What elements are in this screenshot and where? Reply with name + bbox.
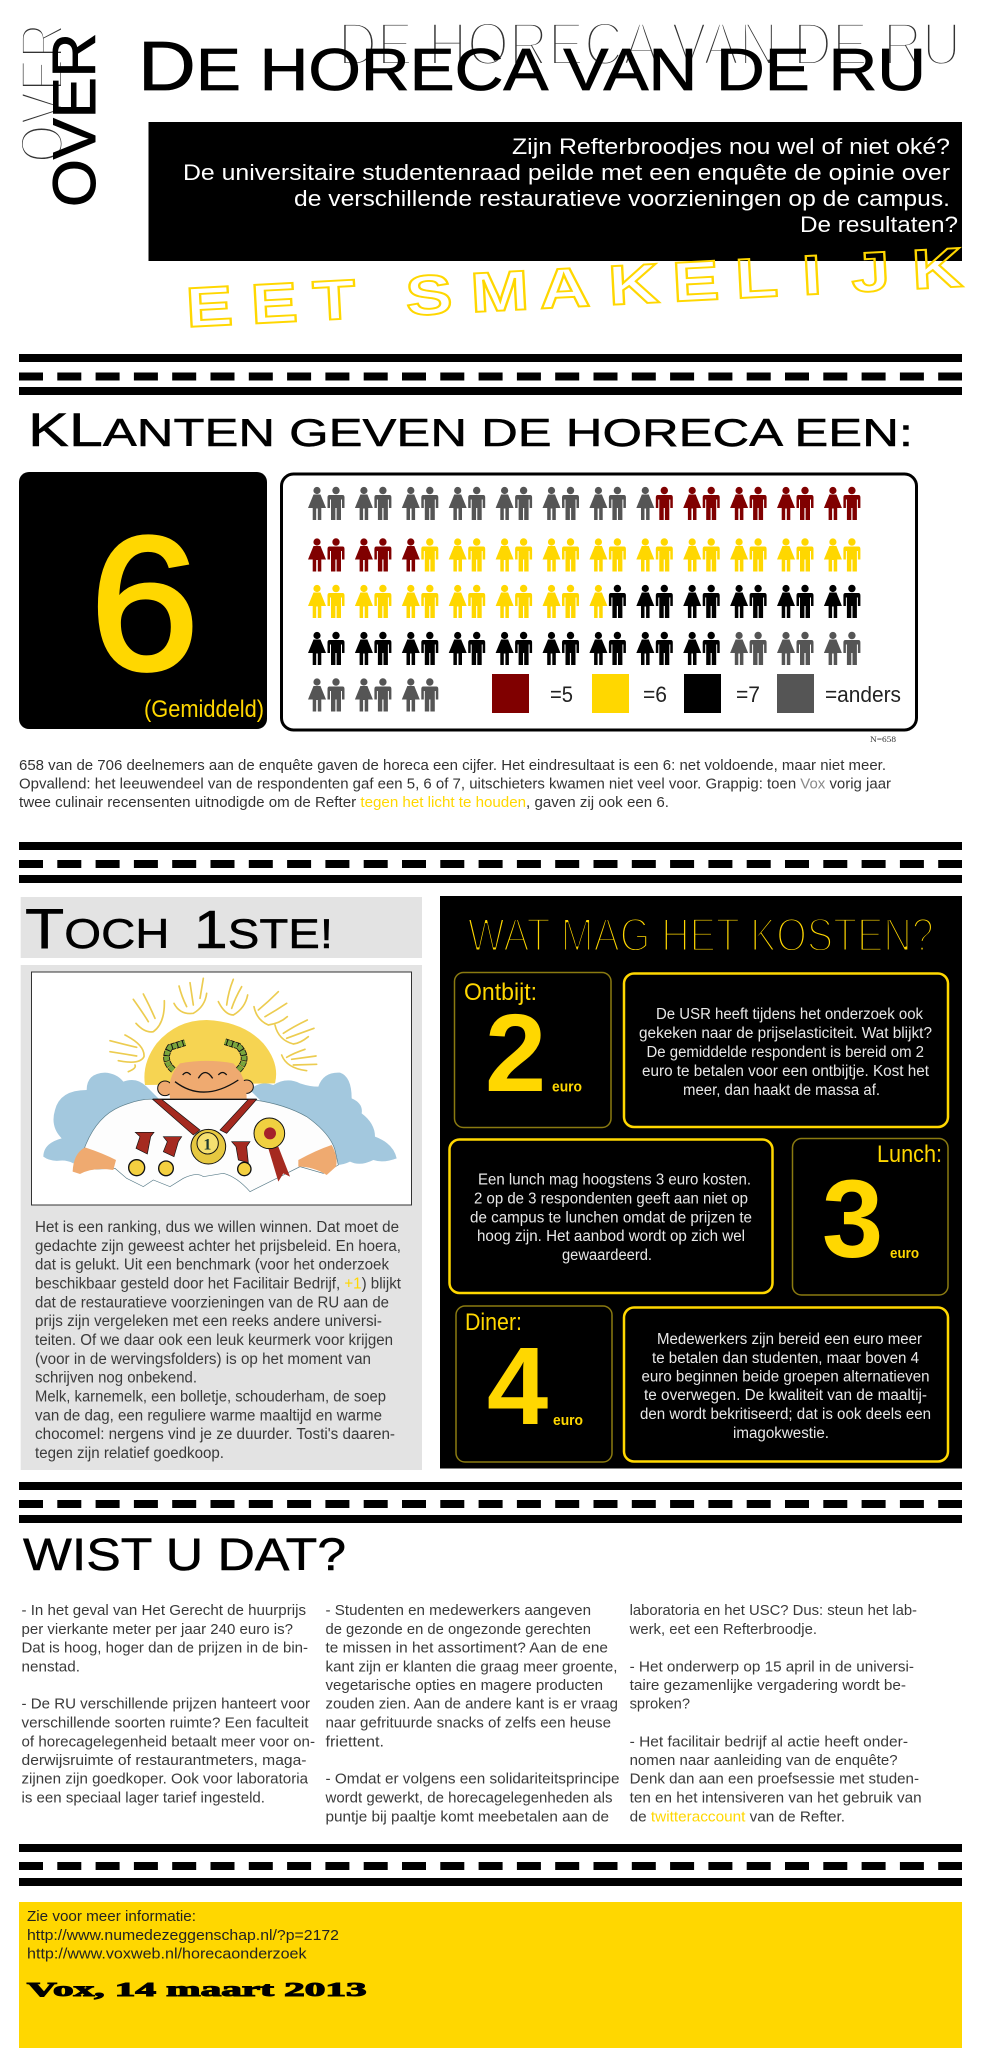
big number six: 6 [90,498,199,710]
text column 2 [324,1602,620,1825]
text column 3: Denk dan aan een proefsessie met studen- [630,1771,919,1788]
text column 1: nenstad. [22,1658,80,1676]
card: ontbijt explanation: gekeken naar de prijselasticiteit. Wat blijkt? [639,1025,932,1042]
text block: ranking: schrijven nog onbekend. [35,1370,197,1387]
text column 1: derwijsruimte of restaurantmeters, maga- [22,1752,306,1769]
legend: =anders [825,682,901,707]
card: ontbijt explanation: euro te betalen voor een ontbijtje. Kost het [642,1063,930,1080]
card: lunch explanation: gewaardeerd. [562,1247,652,1264]
heading: klanten geven de horeca een: KL ANTEN GEVEN DE HORECA EEN: [28,403,913,456]
text column 3: de twitteraccount van de Refter. [630,1808,845,1825]
text column 2: - Studenten en medewerkers aangeven [326,1602,591,1619]
footer panel [19,1902,962,2048]
card: ontbijt price: euro [552,1078,582,1096]
text block: ranking: Melk, karnemelk, een bolletje, schouderham, de soep [35,1389,386,1406]
text column 2: de gezonde en de ongezonde gerechten [326,1621,591,1638]
card: lunch explanation: Een lunch mag hoogstens 3 euro kosten. [478,1172,751,1189]
footer links: Zie voor meer informatie: [27,1908,196,1925]
card: diner explanation: te betalen dan studenten, maar boven 4 [652,1350,919,1367]
text block: ranking: tegen zijn relatief goedkoop. [35,1445,224,1462]
text block: ranking: dat de restauratieve voorzieningen van de RU aan de [35,1294,389,1311]
card: ontbijt explanation: De USR heeft tijdens het onderzoek ook [656,1006,923,1023]
pictogram row 2 [308,538,860,572]
legend: =7 [736,682,760,707]
card: diner explanation [624,1308,948,1462]
text column 1: - De RU verschillende prijzen hanteert voor [22,1696,310,1713]
text block: ranking: dat is gelukt. Uit een benchmark (voor het onderzoek [35,1257,389,1274]
text column 1: - In het geval van Het Gerecht de huurprijs [22,1602,306,1619]
intro panel [148,122,962,261]
text column 1: zijnen zijn goedkoper. Ook voor laboratoria [22,1771,309,1788]
footer links: http://www.voxweb.nl/horecaonderzoek [27,1946,307,1962]
text column 3: sproken? [630,1696,690,1713]
slogan: eet smakelijk: EET SMAKELIJK [184,237,964,339]
intro panel: De resultaten? [800,212,958,237]
text block: ranking: van de dag, een reguliere warme maaltijd en warme [35,1407,382,1424]
text column 2: friettent. [326,1733,384,1750]
panel: wat mag het kosten [440,896,962,1468]
card: lunch price: 3 [822,1158,883,1281]
paragraph: survey result: Opvallend: het leeuwendeel van de respondenten gaf een 5, 6 of 7, uitschieters kwamen niet veel voor. Grappig: toen Vox vorig jaar [19,776,891,792]
text block: ranking: (voor in de wervingsfolders) is op het moment van [35,1351,371,1368]
intro panel: de verschillende restauratieve voorzieningen op de campus. [294,186,950,211]
vertical word: over: OVER [41,33,108,207]
label: gemiddeld: (Gemiddeld) [144,696,264,723]
card: diner price: euro [553,1412,583,1429]
card: ontbijt price [454,972,611,1128]
text column 2: vegetarische opties en magere producten [326,1677,603,1694]
footer date: Vox, 14 maart 2013 [27,1979,367,2001]
text column 2: naar gefrituurde snacks of zelfs een heuse [326,1715,611,1732]
text column 3: laboratoria en het USC? Dus: steun het lab- [630,1602,917,1619]
heading: wist u dat: WIST U DAT? [23,1529,346,1580]
illustration: proud winner with medals: 1 [203,1136,211,1153]
text column 1: is een speciaal lager tarief ingesteld. [22,1790,265,1806]
legend [492,674,901,713]
text block: ranking [35,1219,402,1462]
text block: ranking: beschikbaar gesteld door het Facilitair Bedrijf, +1) blijkt [35,1276,402,1292]
card: lunch price: Lunch: [877,1141,942,1168]
text column 1: Dat is hoog, hoger dan de prijzen in de bin- [22,1640,308,1657]
sample size note: N=658 [870,735,896,744]
card: diner explanation: euro beginnen beide groepen alternatieven [642,1368,930,1386]
text column 2: wordt gewerkt, de horecagelegenheden als [324,1790,612,1806]
text column 3: taire gezamenlijke vergadering wordt be- [630,1677,906,1694]
text block: ranking: teiten. Of we daar ook een leuk keurmerk voor krijgen [35,1332,393,1349]
card: lunch price [792,1138,948,1295]
text block: ranking: chocomel: nergens vind je ze duurder. Tosti's daaren- [35,1426,395,1443]
footer links: http://www.numedezeggenschap.nl/?p=2172 [27,1927,339,1944]
illustration: proud winner with medals [32,972,412,1205]
text column 2: zouden zien. Aan de andere kant is er vraag [326,1696,618,1713]
text column 3 [629,1602,922,1825]
text block: ranking: gedachte zijn geweest achter het prijsbeleid. En hoera, [35,1238,401,1255]
pictogram row 5 [308,678,438,712]
card: diner price: Diner: [465,1309,522,1336]
card: lunch explanation: de campus te lunchen omdat de prijzen te [470,1209,752,1226]
card: ontbijt price: Ontbijt: [464,979,537,1006]
main title: DE HORECA VAN DE RU [138,27,926,105]
text column 3: ten en het intensiveren van het gebruik van [630,1790,922,1806]
card: diner explanation: imagokwestie. [733,1425,829,1442]
intro panel: Zijn Refterbroodjes nou wel of niet oké? [512,134,950,159]
card: ontbijt explanation: De gemiddelde respondent is bereid om 2 [646,1044,924,1061]
card: lunch price: euro [890,1245,919,1262]
text column 3: - Het onderwerp op 15 april in de universi- [630,1658,914,1676]
pictogram row 4 [308,632,860,665]
legend: =5 [550,682,573,707]
card: diner explanation: te overwegen. De kwaliteit van de maaltij- [644,1387,927,1404]
footer links [27,1908,339,1962]
card: diner price [456,1306,612,1462]
card: lunch explanation: hoog zijn. Het aanbod wordt op zich wel [477,1228,745,1245]
paragraph: survey result [19,757,891,811]
paragraph: survey result: twee culinair recensenten uitnodigde om de Refter tegen het licht te houden, gaven zij ook een 6. [19,794,669,811]
text column 1: verschillende soorten ruimte? Een faculteit [22,1715,309,1732]
card: lunch explanation: 2 op de 3 respondenten geeft aan niet op [474,1190,748,1208]
panel: pictogram of respondents [282,474,916,730]
text column 2: - Omdat er volgens een solidariteitsprincipe [326,1771,620,1788]
text column 1: per vierkante meter per jaar 240 euro is? [22,1621,293,1638]
legend: =6 [643,682,667,707]
card: ontbijt explanation: meer, dan haakt de massa af. [683,1082,880,1099]
text column 2: puntje bij paaltje komt meebetalen aan de [326,1808,609,1825]
pictogram row 1 [308,487,860,520]
pictogram row 3 [308,585,860,618]
panel: average grade [19,472,267,729]
card: diner explanation: Medewerkers zijn bereid een euro meer [657,1331,922,1348]
text column 3: - Het facilitair bedrijf al actie heeft onder- [630,1733,908,1750]
text column 1 [22,1602,315,1806]
panel: toch 1ste text and illustration [21,965,422,1470]
intro panel: De universitaire studentenraad peilde met een enquête de opinie over [183,160,950,185]
paragraph: survey result: 658 van de 706 deelnemers aan de enquête gaven de horeca een cijfer. Het eindresultaat is een 6: net voldoende, maar niet meer. [19,757,886,774]
card: ontbijt price: 2 [485,992,546,1115]
text column 1: of horecagelegenheid betaalt meer voor on- [22,1733,315,1750]
card: ontbijt explanation [624,974,948,1127]
text column 2: kant zijn er klanten die graag meer groente, [326,1658,618,1676]
card: diner explanation: den wordt bekritiseerd; dat is ook deels een [640,1406,931,1423]
card: lunch explanation [450,1140,772,1293]
text column 2: te missen in het assortiment? Aan de ene [326,1640,608,1657]
text block: ranking: Het is een ranking, dus we willen winnen. Dat moet de [35,1219,399,1236]
text column 3: werk, eet een Refterbroodje. [629,1621,817,1638]
text column 3: nomen naar aanleiding van de enquête? [630,1752,898,1769]
card: diner price: 4 [487,1325,548,1448]
text block: ranking: prijs zijn vergeleken met een reeks andere universi- [35,1313,382,1330]
panel: toch 1ste heading: TOCH 1STE! [25,897,333,961]
